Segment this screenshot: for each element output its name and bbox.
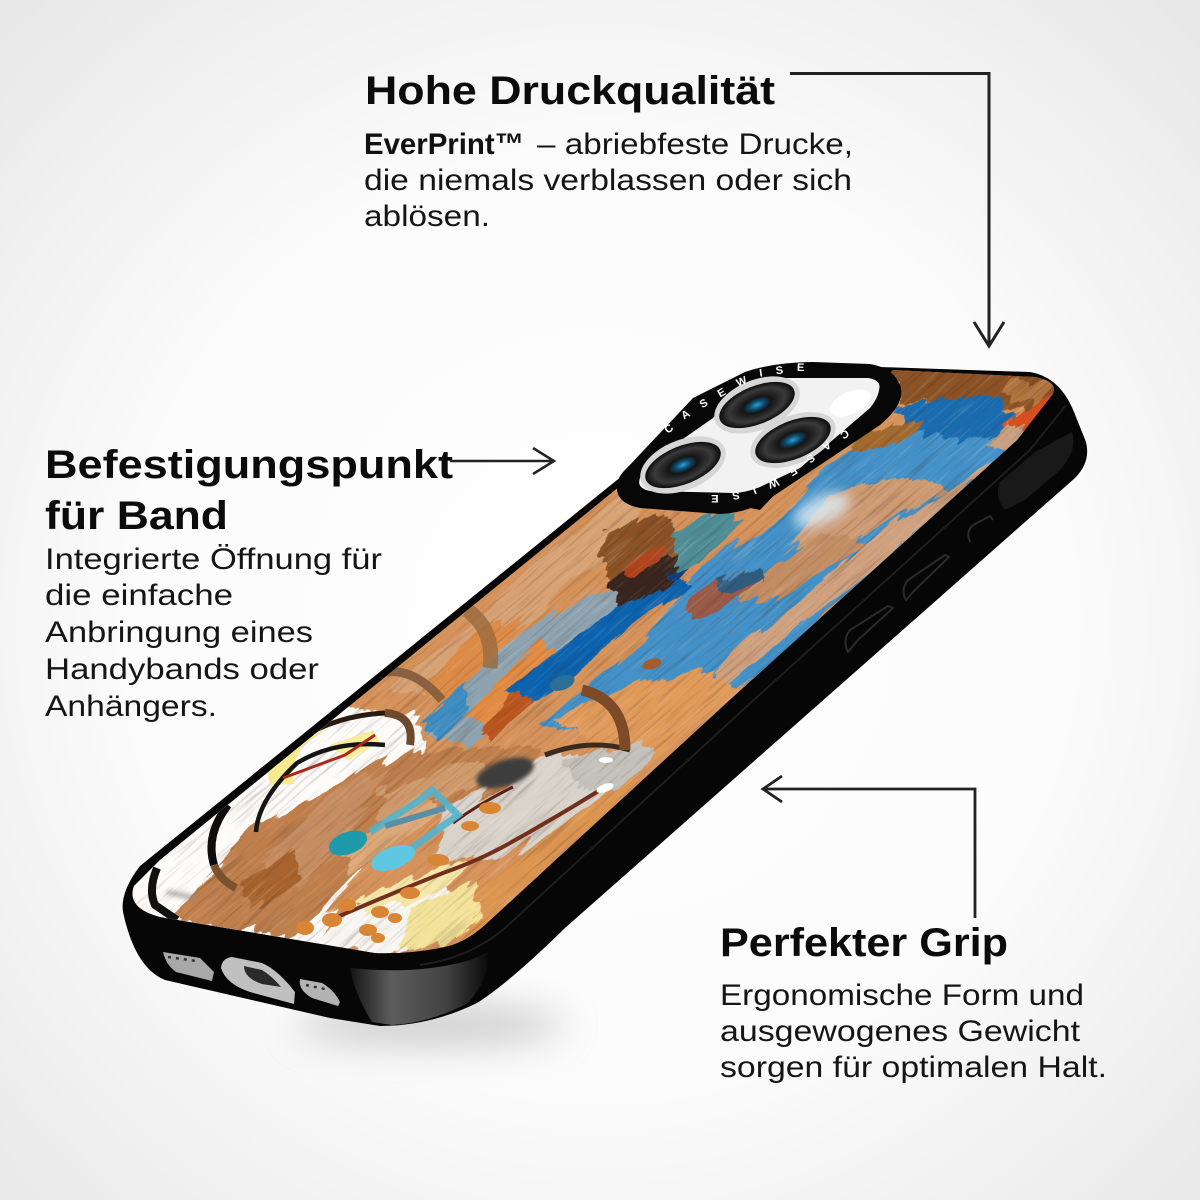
paint dots xyxy=(296,802,501,943)
text: print quality: ablösen. xyxy=(364,200,490,233)
lens left xyxy=(632,425,734,505)
brand lettering bottom: CASEWISE xyxy=(712,430,848,502)
callout: strap attachment xyxy=(45,443,453,723)
tan patch xyxy=(789,477,948,551)
tan watercolor field xyxy=(174,744,542,938)
dark blob red xyxy=(624,545,666,578)
dark blob xyxy=(596,513,678,582)
cloud highlight xyxy=(789,485,855,535)
camera glass flash xyxy=(825,384,875,422)
arrow: print quality xyxy=(790,74,1004,346)
grey band xyxy=(423,590,618,750)
top brown xyxy=(890,370,1054,415)
grey lower field right xyxy=(561,739,655,794)
text: grip: sorgen für optimalen Halt. xyxy=(720,1051,1107,1084)
text: strap attachment: Anbringung eines xyxy=(45,616,313,649)
top blue xyxy=(894,394,1016,445)
top ochre xyxy=(852,418,924,452)
heading: print quality: Hohe Druckqualität xyxy=(365,69,775,113)
side button lower xyxy=(845,606,893,652)
orange stroke xyxy=(464,636,556,726)
text: strap attachment: Anhängers. xyxy=(45,690,217,723)
glass reflection xyxy=(165,890,195,900)
text: print quality: EverPrint™ xyxy=(364,128,524,161)
camera ring xyxy=(617,362,901,514)
brand lettering top: CASEWISE xyxy=(664,363,804,432)
lens top xyxy=(706,365,808,445)
printed artwork xyxy=(132,370,1054,954)
top orange-red xyxy=(1000,392,1054,434)
callout: grip xyxy=(720,921,1107,1084)
orange lower middle xyxy=(553,667,738,766)
text: grip: ausgewogenes Gewicht xyxy=(720,1015,1081,1048)
phone drop shadow xyxy=(295,1001,565,1049)
white lower-left field xyxy=(132,706,432,943)
dark blob navy xyxy=(663,567,689,582)
top pale tan xyxy=(986,420,1024,452)
upper left orange xyxy=(418,612,528,709)
lens right xyxy=(742,401,844,479)
heading: strap attachment xyxy=(45,443,453,538)
speaker left xyxy=(163,952,214,981)
brush streak light xyxy=(37,131,1143,1169)
camera glass xyxy=(639,378,880,493)
text: grip: Ergonomische Form und xyxy=(720,979,1084,1012)
speaker right xyxy=(300,979,340,1006)
heading: grip: Perfekter Grip xyxy=(720,921,1008,965)
dark ellipse xyxy=(472,751,538,795)
side button small xyxy=(968,516,993,542)
text: strap attachment: die einfache xyxy=(45,579,233,612)
side switch xyxy=(998,432,1074,510)
watercolor dark patch xyxy=(240,848,302,909)
phone case illustration xyxy=(122,362,1088,1026)
bottom yellow xyxy=(398,880,484,950)
text: print quality xyxy=(364,128,853,233)
side button upper xyxy=(903,555,949,600)
tan patch lower xyxy=(738,532,866,604)
bottom white xyxy=(314,886,471,954)
dark patch blue xyxy=(716,568,765,594)
dark patch red xyxy=(685,570,764,620)
text: print quality: – abriebfeste Drucke, xyxy=(537,128,853,161)
watercolor pale patch xyxy=(341,794,447,876)
top tan xyxy=(1002,376,1053,407)
dark blob shadow xyxy=(606,554,680,607)
text: grip xyxy=(720,979,1107,1084)
text: strap attachment: Integrierte Öffnung für xyxy=(45,543,382,576)
text: strap attachment: Handybands oder xyxy=(45,653,319,686)
brush streak dark xyxy=(133,370,1053,953)
deep blue stroke xyxy=(504,578,692,702)
heading: strap attachment: für Band xyxy=(45,494,228,538)
arrow: grip xyxy=(763,776,975,918)
heading: strap attachment: Befestigungspunkt xyxy=(45,443,453,487)
right lower orange xyxy=(459,776,639,938)
rust stroke xyxy=(481,690,534,742)
text: strap attachment xyxy=(45,543,382,723)
watercolor upper patch xyxy=(375,760,486,822)
upper left tan xyxy=(388,494,642,698)
tan strip right edge xyxy=(714,458,995,685)
charging port xyxy=(221,957,295,1004)
blue stroke left xyxy=(420,681,470,742)
case body xyxy=(123,364,1087,1026)
camera module xyxy=(616,362,902,514)
grey lower field xyxy=(436,752,606,862)
watercolor light patch xyxy=(262,769,390,890)
magnetic ring arcs xyxy=(152,610,630,920)
case rim line xyxy=(420,405,1066,965)
music note xyxy=(325,790,458,876)
text: print quality: die niemals verblassen oder sich xyxy=(364,164,852,197)
light blue field xyxy=(538,426,1024,731)
callout: print quality xyxy=(364,69,853,233)
teal panel xyxy=(670,513,744,574)
bottom corner highlight xyxy=(350,952,488,1025)
arrow: strap attachment xyxy=(450,448,554,474)
yellow crescents xyxy=(268,728,330,785)
bottom yellow stripe xyxy=(354,860,468,917)
